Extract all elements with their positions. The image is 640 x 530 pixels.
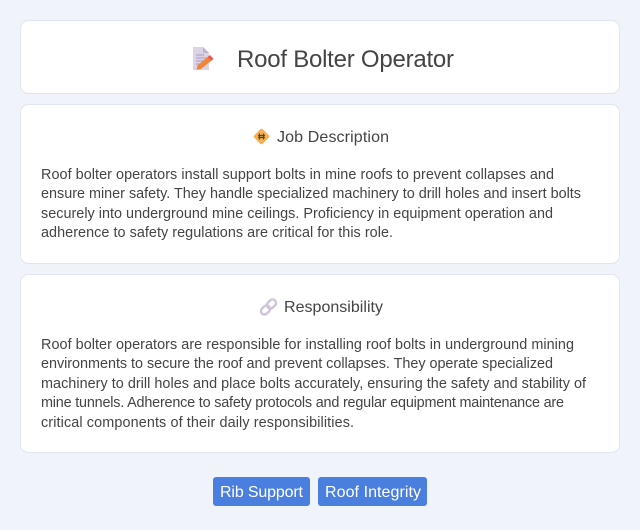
title: Roof Bolter Operator [237,46,454,73]
text block: responsibility: Roof bolter operators are responsible for installing roof bolts in underground mining [41,337,574,353]
text block: job description [41,167,581,241]
text block: job description: securely into underground mine ceilings. Proficiency in equipment operation and [41,206,553,222]
icon: chain link [259,298,278,316]
panel: responsibility [20,274,620,452]
icon: document with pencil [193,47,214,70]
button: rib support: Rib Support [220,484,304,501]
text block: job description: Roof bolter operators install support bolts in mine roofs to prevent collapses and [41,167,554,183]
text block: responsibility: environments to secure the roof and prevent collapses. They operate specialized [41,356,553,372]
text block: responsibility: machinery to drill holes and place bolts accurately, ensuring the safety and stability of [41,376,587,392]
text block: responsibility [41,337,587,431]
button: rib support [213,477,310,506]
text block: responsibility: critical components of their daily responsibilities. [41,415,354,431]
panel: job description [20,104,620,264]
heading: responsibility: Responsibility [284,299,383,316]
heading: job description: Job Description [277,129,389,146]
text block: responsibility: mine tunnels. Adherence to safety protocols and regular equipment maintenance are [41,395,564,411]
button: roof integrity [318,477,427,506]
text block: job description: adherence to safety regulations are critical for this role. [41,225,393,241]
text block: job description: ensure miner safety. They handle specialized machinery to drill holes and insert bolts [41,186,581,202]
panel: title card [20,20,620,94]
icon: orange diamond sign [253,128,270,145]
button: roof integrity: Roof Integrity [325,484,421,501]
